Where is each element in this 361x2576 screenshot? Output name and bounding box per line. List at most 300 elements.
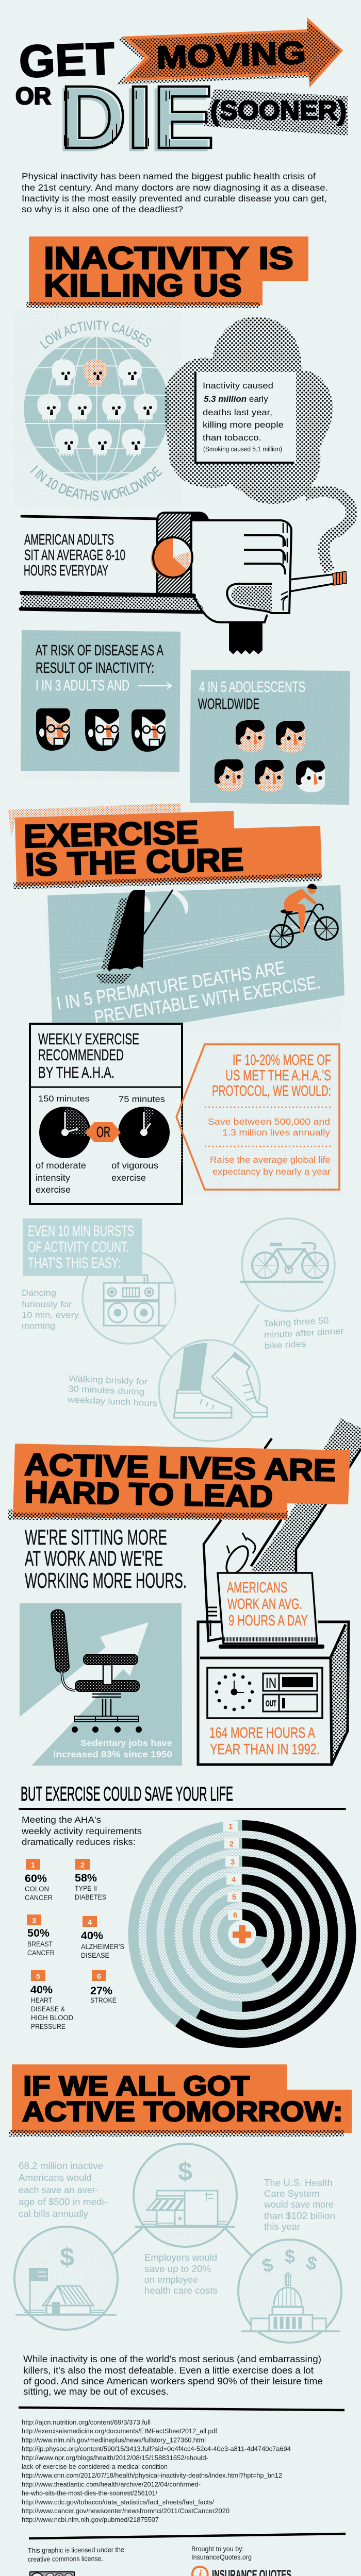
- stat 3: [27, 1914, 55, 1957]
- intro text: [22, 171, 328, 214]
- walking text: Walking briskly for: [69, 1374, 148, 1387]
- globe: [21, 335, 173, 484]
- weekly heading: RECOMMENDED: [38, 1046, 124, 1064]
- banner dots: [26, 302, 260, 308]
- bursts text: OF ACTIVITY COUNT.: [28, 1239, 129, 1256]
- sitting figure: [21, 513, 347, 654]
- moderate caption: of moderate: [36, 1160, 86, 1171]
- license note: This graphic is licensed under the: [28, 2546, 124, 2554]
- closing text: of good. And since American workers spend 90% of their leisure time: [23, 2376, 323, 2386]
- bike circle: [240, 1218, 335, 1311]
- time clock machine: [198, 1520, 349, 1765]
- arm halftone: [251, 1418, 361, 1571]
- card text: 9 HOURS A DAY: [228, 1613, 308, 1629]
- sit text: [24, 532, 125, 579]
- dollar: $: [178, 2157, 192, 2186]
- connector lines: [152, 1304, 259, 1358]
- save lives text: 1.3 million lives annually: [222, 1127, 330, 1138]
- panel dots: [47, 885, 344, 1045]
- card slot: [219, 1645, 324, 1649]
- preventable panel: [44, 884, 344, 1048]
- stat 4: DISEASE: [81, 1952, 109, 1959]
- closing text: sitting, we may be out of excuses.: [23, 2386, 169, 2397]
- stat 4: 4: [88, 1918, 92, 1927]
- SOONER: (SOONER): [210, 96, 347, 126]
- reaper: [95, 890, 188, 984]
- banner: [29, 236, 308, 305]
- household text: [19, 2161, 107, 2219]
- stat 5: 40%: [30, 1984, 53, 1996]
- sources list: http://www.ncbi.nlm.nih.gov/pubmed/21875507: [22, 2516, 159, 2523]
- adult head plain: [132, 709, 166, 752]
- stat text: than tobacco.: [203, 433, 261, 443]
- stat text: (Smoking caused 5.1 million): [203, 446, 282, 453]
- medical cross: [233, 1925, 251, 1943]
- stat 2: [75, 1859, 106, 1901]
- dollars: [260, 2246, 319, 2277]
- teen head: [255, 760, 284, 792]
- bike rides text: bike rides: [264, 1339, 306, 1351]
- banner: [12, 2064, 352, 2133]
- stat 2: TYPE II: [75, 1885, 97, 1892]
- household text: cal bills annually: [19, 2209, 88, 2219]
- card teeth: [224, 1637, 316, 1641]
- ring labels: 2: [229, 1840, 234, 1849]
- OR: OR: [15, 82, 51, 109]
- arrow halftone: [129, 22, 340, 82]
- weekly heading: WEEKLY EXERCISE: [38, 1030, 139, 1048]
- panel shadow: [24, 771, 180, 778]
- sources list: http://www.cdc.gov/tobacco/data_statistics/fact_sheets/fast_facts/: [22, 2498, 214, 2506]
- stat 3: 50%: [27, 1927, 50, 1939]
- closing text: [23, 2354, 323, 2397]
- bike frame: [282, 904, 326, 936]
- banner: [15, 811, 322, 886]
- closing text: killers, it's also the most defeatable. Even a little exercise does a lot: [23, 2365, 314, 2376]
- ring labels: 5: [232, 1893, 236, 1902]
- MOVING: MOVING: [156, 35, 306, 76]
- stat 4: ALZHEIMER'S: [81, 1943, 124, 1951]
- upper cushion: [84, 1654, 138, 1665]
- sitting more heading: WORKING MORE HOURS.: [25, 1568, 187, 1592]
- in slot: [263, 1673, 317, 1691]
- preventable text: I IN 5 PREMATURE DEATHS ARE: [55, 957, 287, 1014]
- skull row three: [55, 429, 145, 456]
- household text: age of $500 in medi-: [19, 2197, 107, 2207]
- life expectancy text: [210, 1155, 331, 1177]
- speed lines: [58, 922, 316, 979]
- banner dots: [9, 2130, 344, 2137]
- heading rule: [20, 1808, 345, 1810]
- heading line one: IF WE ALL GOT: [23, 2071, 250, 2102]
- sedentary text: [53, 1738, 172, 1759]
- stat 6: 6: [97, 1972, 101, 1981]
- title arrow: [122, 18, 343, 88]
- employer text: health care costs: [144, 2285, 218, 2296]
- smoke trail: [304, 492, 351, 571]
- heading: exercise is the cure: [8, 803, 322, 889]
- banner dots: [8, 1510, 288, 1520]
- heading line two: IS THE CURE: [25, 842, 244, 883]
- stat 3: 3: [32, 1917, 36, 1925]
- office chair panel: [20, 1603, 182, 1766]
- sleeve top line: [22, 516, 158, 519]
- cc badge: [29, 2571, 75, 2576]
- moderate caption: [36, 1160, 86, 1195]
- bursts text: EVEN 10 MIN BURSTS: [28, 1223, 134, 1240]
- license note: creative commons license.: [28, 2555, 103, 2563]
- walking text: [67, 1374, 157, 1409]
- risk intro text: Meeting the AHA's: [22, 1815, 101, 1825]
- dotted rings: [142, 1834, 342, 2034]
- watch: [151, 537, 192, 579]
- 75 minutes label: 75 minutes: [119, 1094, 165, 1104]
- orange halftone: [8, 803, 181, 838]
- skull row two: [37, 394, 157, 421]
- arm lines: [265, 1438, 361, 1572]
- sources list: http://www.cnn.com/2012/07/18/health/physical-inactivity-deaths/index.html?hpt=hp_bn12: [22, 2471, 282, 2479]
- cyclist: [270, 884, 338, 947]
- dancing text: 10 min. every: [22, 1310, 79, 1320]
- dollar: $: [60, 2243, 74, 2272]
- heading line two: ACTIVE TOMORROW:: [22, 2095, 343, 2127]
- halftone backdrop: [13, 311, 180, 506]
- banner dots overlap: [12, 2130, 344, 2133]
- dancing text: Dancing: [22, 1288, 56, 1298]
- life expectancy text: expectancy by nearly a year: [212, 1166, 331, 1177]
- bursts text: [28, 1223, 134, 1272]
- teen head healthy: [296, 760, 325, 792]
- front shoe: [174, 1390, 232, 1418]
- save lives text: Save between 500,000 and: [208, 1116, 330, 1127]
- chair base: [74, 1716, 139, 1722]
- stat 5: HEART: [31, 1996, 52, 2004]
- cloak: [107, 890, 145, 972]
- stat box: [195, 372, 296, 463]
- panel background: [47, 885, 344, 1045]
- stat 2: DIABETES: [75, 1893, 106, 1901]
- callout halftone: [176, 1041, 342, 1195]
- heading line two: KILLING US: [44, 268, 242, 303]
- inner panel: [207, 1668, 322, 1718]
- walking circle: [159, 1340, 267, 1441]
- stat text: killing more people: [203, 420, 284, 430]
- speech bubble: [192, 2567, 208, 2576]
- forearm: [21, 593, 206, 613]
- intro text: Physical inactivity has been named the biggest public health crisis of: [22, 171, 316, 181]
- adolescents text: 4 IN 5 ADOLESCENTS: [199, 679, 305, 696]
- sponsor note: Brought to you by:: [191, 2545, 244, 2553]
- bike rides text: [263, 1315, 344, 1351]
- machine body: [198, 1622, 349, 1765]
- boombox: [104, 1275, 175, 1326]
- heading line one: ACTIVE LIVES ARE: [24, 1447, 336, 1488]
- dancing text: morning: [22, 1321, 55, 1331]
- government text: The U.S. Health: [264, 2178, 333, 2188]
- panel background: [20, 1603, 182, 1766]
- sources list: [22, 2418, 291, 2523]
- bursts box: [23, 1218, 142, 1276]
- stat text: deaths last year,: [203, 408, 272, 417]
- arc text bottom: I IN 10 DEATHS WORLDWIDE: [30, 465, 162, 501]
- stat 1: [25, 1859, 53, 1902]
- vigorous caption: [111, 1160, 158, 1183]
- callout frame: [176, 1044, 339, 1190]
- casters: [72, 1726, 142, 1733]
- ring labels: 4: [232, 1875, 236, 1884]
- back shoe: [212, 1356, 267, 1417]
- save lives text: [208, 1116, 330, 1138]
- sources list: http://exerciseismedicine.org/documents/EIMFactSheet2012_all.pdf: [22, 2427, 217, 2435]
- bursts text: THAT'S THIS EASY:: [28, 1255, 121, 1272]
- teen head: [236, 720, 265, 752]
- stat text: 5.3 million early: [204, 394, 268, 404]
- panel dots: [190, 670, 350, 805]
- skull faces: [47, 371, 152, 450]
- stat 1: 60%: [25, 1873, 47, 1885]
- lower cushion: [75, 1681, 139, 1691]
- adult head dotted: [36, 708, 70, 751]
- intro text: Inactivity is the most easily prevented and curable disease you can get,: [22, 193, 327, 204]
- sponsor note: [191, 2545, 252, 2561]
- black value arcs: [133, 1825, 351, 2043]
- intro text: the 21st century. And many doctors are now diagnosing it as a disease.: [22, 182, 328, 193]
- dancing text: [22, 1288, 79, 1331]
- stat 3: CANCER: [27, 1949, 55, 1957]
- bike seat: [281, 909, 293, 913]
- divider: [30, 1086, 182, 1088]
- ring labels: [223, 1821, 242, 1920]
- adult head plain: [85, 709, 119, 751]
- worldwide: WORLDWIDE: [198, 696, 259, 713]
- chair arm: [62, 1672, 75, 1690]
- clock right: [118, 1107, 170, 1158]
- rising arrow: [20, 1622, 149, 1766]
- life expectancy text: Raise the average global life: [210, 1155, 331, 1165]
- easy activity section: [22, 1218, 344, 1441]
- stat 6: [90, 1970, 117, 2004]
- stat 5: PRESSURE: [31, 2023, 65, 2030]
- store: [135, 2191, 235, 2227]
- sit text: AMERICAN ADULTS: [24, 532, 114, 548]
- strap cap: [191, 513, 208, 519]
- machine side halftone: [332, 1625, 349, 1762]
- arc text top: LOW ACTIVITY CAUSES: [39, 320, 152, 349]
- dollars: $: [304, 2251, 319, 2275]
- 164 hours text: [209, 1725, 320, 1758]
- heading: if we all got active: [9, 2064, 352, 2137]
- protocol callout: [176, 1041, 342, 1195]
- household text: each save an aver-: [19, 2185, 99, 2195]
- out slot: OUT: [266, 1699, 276, 1708]
- employer text: [144, 2252, 218, 2296]
- chair: [51, 1609, 142, 1733]
- flag: [29, 2268, 48, 2314]
- employer text: on employee: [144, 2275, 198, 2285]
- or badge: [85, 1122, 121, 1142]
- government text: Care System: [264, 2189, 320, 2199]
- arm from top right: [251, 1418, 361, 1572]
- out slot: [263, 1694, 317, 1711]
- rule: [19, 2408, 344, 2410]
- stat 1: 1: [31, 1861, 35, 1870]
- stat 2: 2: [80, 1861, 85, 1870]
- card text: AMERICANS: [227, 1580, 287, 1596]
- sit text: HOURS EVERYDAY: [24, 563, 108, 579]
- rider body: [284, 889, 317, 933]
- dotted divider: [205, 1107, 331, 1108]
- government text: than $102 billion: [264, 2211, 335, 2221]
- cigarette: [290, 571, 347, 591]
- heading line two: HARD TO LEAD: [24, 1475, 273, 1514]
- weekly heading: BY THE A.H.A.: [38, 1063, 114, 1081]
- sources list: he-who-sits-the-most-dies-the-soonest/256101/: [22, 2489, 157, 2497]
- stat 3: BREAST: [27, 1940, 53, 1948]
- time card: [218, 1573, 317, 1643]
- risk text: RESULT OF INACTIVITY:: [36, 660, 154, 676]
- rule: [29, 2534, 346, 2538]
- smoke cloud: [165, 317, 351, 571]
- GET: GET: [18, 33, 116, 87]
- dotted divider: [205, 1146, 331, 1147]
- ring labels: 1: [228, 1822, 233, 1831]
- sitting more heading: AT WORK AND WE'RE: [25, 1546, 163, 1570]
- hand: [191, 520, 291, 622]
- risk text: [36, 642, 163, 694]
- household circle: [14, 2227, 118, 2330]
- scythe blade: [172, 890, 188, 915]
- fingers: [244, 535, 285, 574]
- reaper shadow: [95, 896, 134, 984]
- stat 2: 58%: [75, 1872, 97, 1884]
- rider head: [308, 886, 316, 894]
- government circle: [238, 2240, 341, 2343]
- walking text: weekday lunch hours: [67, 1395, 157, 1409]
- DIE tick marks: [64, 91, 170, 146]
- sitting more heading: [25, 1525, 187, 1592]
- vigorous caption: of vigorous: [111, 1160, 158, 1171]
- in slot: IN: [266, 1675, 276, 1691]
- globe panel: [13, 311, 180, 506]
- reaper skull: [143, 895, 151, 912]
- moderate caption: exercise: [36, 1184, 71, 1195]
- helmet: [307, 884, 317, 889]
- boombox circle: [83, 1251, 175, 1344]
- skull row one: [52, 359, 142, 386]
- cloud: [165, 317, 333, 504]
- weekly heading: [38, 1030, 139, 1081]
- bike icon: [240, 1243, 328, 1282]
- stat 5: 5: [36, 1972, 40, 1981]
- government text: [264, 2178, 335, 2232]
- title: [15, 18, 348, 170]
- capitol: [241, 2272, 340, 2331]
- scythe pole: [144, 890, 173, 934]
- hand: [204, 1520, 281, 1641]
- stat 5: DISEASE &: [31, 2005, 65, 2013]
- household text: Americans would: [19, 2173, 92, 2183]
- ring labels: 6: [233, 1911, 237, 1920]
- sources list: http://www.nlm.nih.gov/medlineplus/news/fullstory_127360.html: [22, 2436, 206, 2444]
- radial chart: [128, 1820, 356, 2048]
- walking text: 30 minutes during: [68, 1384, 145, 1397]
- sooner halftone: [204, 89, 348, 135]
- sources list: http://jp.physoc.org/content/590/15/3413.full?sid=0e4f4cc4-52c4-40e3-a811-4d4740c7a694: [22, 2445, 291, 2452]
- bike wheels: [270, 917, 338, 947]
- banner dots overlap: [29, 302, 260, 305]
- sit text: SIT AN AVERAGE 8-10: [24, 547, 125, 564]
- 150 minutes label: 150 minutes: [38, 1094, 90, 1104]
- weekly exercise box: [30, 1024, 182, 1204]
- card text: [227, 1580, 308, 1629]
- stat 5: HIGH BLOOD: [31, 2014, 73, 2022]
- closing text: While inactivity is one of the world's most serious (and embarrassing): [23, 2354, 321, 2364]
- banner dots overlap: [17, 873, 322, 886]
- clock face: [215, 1673, 254, 1711]
- heading: active lives: [8, 1444, 350, 1520]
- stat 4: 40%: [81, 1930, 103, 1942]
- panel dots: [21, 630, 180, 772]
- stem: [103, 1665, 112, 1685]
- stat 4: [81, 1916, 124, 1959]
- 164 hours text: 164 MORE HOURS A: [209, 1725, 315, 1741]
- sources list: http://www.cancer.gov/newscenter/newsfromnci/2011/CostCancer2020: [22, 2507, 229, 2515]
- bike rides text: Taking three 50: [263, 1315, 329, 1329]
- savings section: [14, 2144, 341, 2343]
- heading: inactivity is killing us: [26, 236, 308, 308]
- panel background: [21, 630, 180, 772]
- clock left: [39, 1107, 91, 1158]
- sedentary text: Sedentary jobs have: [80, 1738, 172, 1748]
- panel shadow: [44, 907, 344, 1048]
- connectors: [113, 2227, 251, 2256]
- heading line one: INACTIVITY IS: [44, 241, 293, 276]
- chair post: [92, 1694, 121, 1716]
- sources list: http://www.theatlantic.com/health/archive/2012/04/confirmed-: [22, 2480, 201, 2488]
- employer text: Employers would: [144, 2252, 217, 2263]
- center disc: [228, 1920, 256, 1948]
- wristband: [229, 623, 262, 654]
- adults risk panel: [21, 630, 180, 778]
- risk intro text: weekly activity requirements: [21, 1826, 142, 1836]
- banner dots overlap: [13, 1513, 287, 1518]
- dollars: $: [260, 2253, 275, 2277]
- rear leg: [232, 1351, 251, 1371]
- license note: [28, 2546, 124, 2563]
- employer text: save up to 20%: [144, 2264, 211, 2274]
- DIE outline: DIE: [60, 67, 215, 167]
- sources list: http://www.npr.org/blogs/health/2012/08/15/158831652/should-: [22, 2454, 208, 2462]
- risk intro text: dramatically reduces risks:: [22, 1837, 136, 1847]
- government text: would save more: [264, 2199, 334, 2210]
- chart base: [128, 1820, 356, 2048]
- stat 5: [30, 1970, 73, 2030]
- teen head: [215, 759, 243, 791]
- card text: WORK AN AVG.: [227, 1596, 302, 1613]
- stat text: [203, 381, 284, 453]
- household text: 68.2 million inactive: [19, 2161, 103, 2171]
- dancing text: furiously for: [22, 1299, 72, 1309]
- risk text: I IN 3 ADULTS AND: [36, 677, 129, 694]
- or badge: OR: [96, 1124, 110, 1141]
- insurance quotes logo: [192, 2567, 291, 2576]
- bike rides text: minute after dinner: [264, 1326, 344, 1340]
- banner: [13, 1444, 350, 1519]
- thumb dots: [231, 586, 272, 611]
- stat 1: COLON: [25, 1885, 49, 1893]
- risk text: AT RISK OF DISEASE AS A: [36, 642, 163, 659]
- stat 6: STROKE: [90, 1996, 117, 2004]
